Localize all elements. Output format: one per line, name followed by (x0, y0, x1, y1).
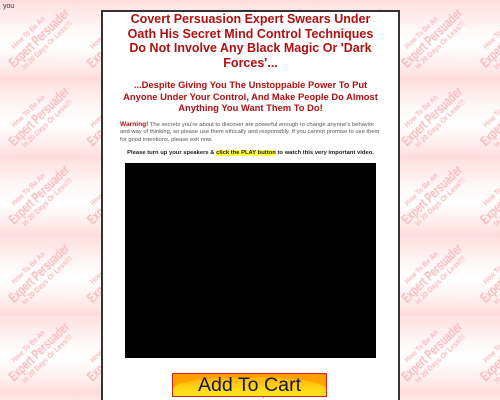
headline: Oath His Secret Mind Control Techniques (128, 27, 373, 41)
top-left stray text: you (3, 3, 14, 10)
small purple text below button: Secure Transaction By ClickBank (210, 393, 291, 399)
warning paragraph (120, 121, 379, 143)
video instruction: Please turn up your speakers & click the PLAY button to watch this very important video. (127, 150, 374, 156)
main content panel (101, 10, 400, 400)
warning paragraph: for good intentions, please exit now. (120, 137, 213, 143)
button sheen (173, 376, 326, 396)
subheadline: ...Despite Giving You The Unstoppable Power To Put (134, 79, 367, 90)
headline: Do Not Involve Any Black Magic Or 'Dark (129, 41, 372, 55)
button label: Add To Cart (198, 374, 301, 396)
add to cart button (172, 372, 327, 397)
video player (125, 163, 376, 358)
subheadline: Anything You Want Them To Do! (178, 102, 323, 113)
warning paragraph: Warning! The secrets you're about to discover are powerful enough to change anyone's behavior (120, 121, 374, 128)
subheadline (123, 79, 378, 113)
headline: Covert Persuasion Expert Swears Under (131, 12, 370, 26)
headline (128, 12, 373, 70)
headline: Forces'... (223, 56, 278, 70)
subheadline: Anyone Under Your Control, And Make People Do Almost (123, 90, 378, 102)
warning paragraph: and way of thinking, so please use them ethically and responsibly. If you cannot promise to use them (120, 129, 379, 135)
